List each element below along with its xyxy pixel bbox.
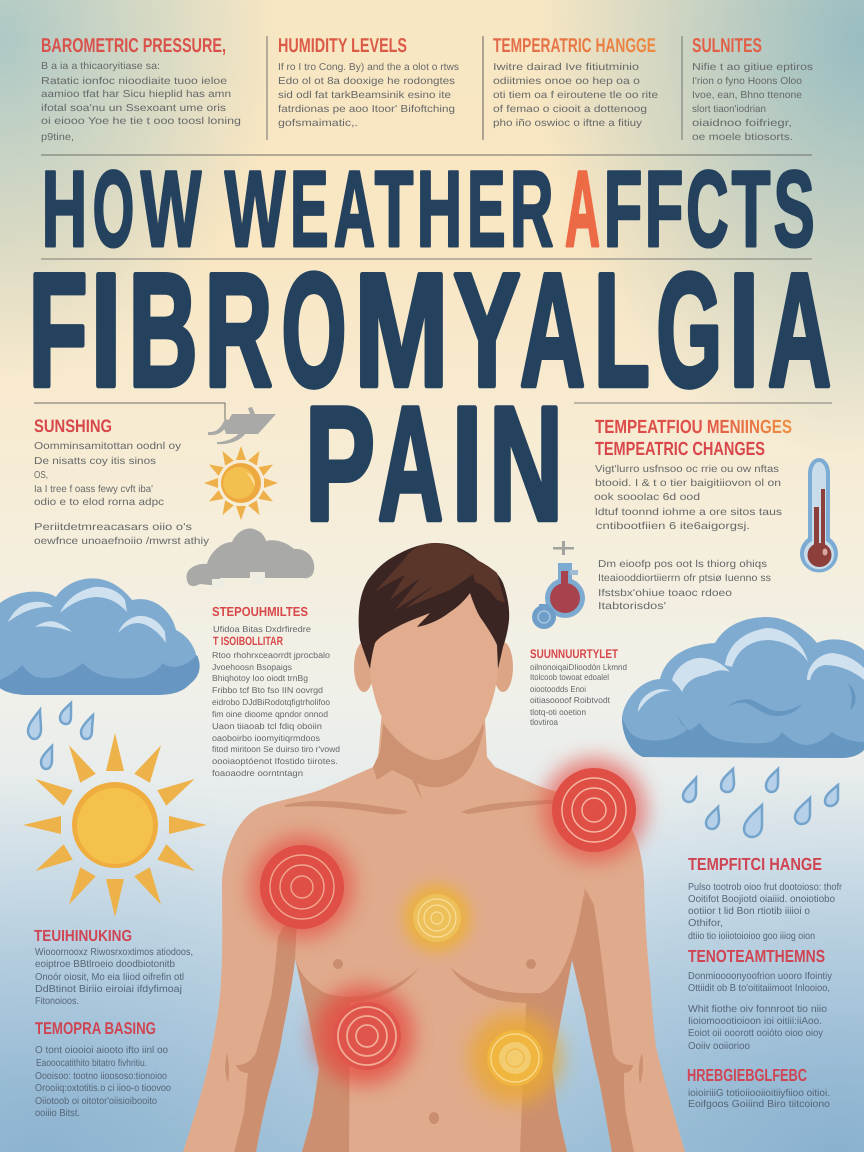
text block: temopra basing: Orooiiq:oxtotitis.o ci iioo-o tioovoo bbox=[35, 1083, 171, 1094]
text block: barometric pressure: aamioo tfat har Sicu hieplid has amn bbox=[41, 89, 231, 100]
left arm bbox=[183, 806, 300, 1152]
icon: left rain cloud bbox=[0, 578, 200, 695]
heading: temopra basing: TEMOPRA BASING bbox=[35, 1019, 156, 1038]
icon: left rain drops bbox=[28, 703, 93, 769]
face bbox=[370, 570, 498, 760]
pain spot: mid chest bbox=[403, 884, 471, 952]
title line: fibromyalgia: G bbox=[656, 240, 722, 420]
title line: how weather affects: O bbox=[93, 148, 134, 269]
text block: sunshing: OS, bbox=[34, 470, 48, 481]
title line: how weather affects: H bbox=[42, 148, 87, 269]
text block: teuihinuking: eoiptroe BBtlroeio doodbiotonitb bbox=[35, 959, 175, 970]
text block: stepoulmiltes body: Fribbo tcf Bto fso IIN oovrgd bbox=[212, 685, 323, 695]
icon: thermometer bbox=[800, 458, 838, 572]
text block: tenoteamthemns detail: Eoiot oii ooorott ooióto oioo oioy bbox=[688, 1028, 823, 1039]
text block: barometric pressure: ifotal soa'nu un Ssexoant ume oris bbox=[41, 103, 226, 114]
text block: humidity levels: Edo ol ot 8a dooxige he rodongtes bbox=[278, 76, 455, 87]
right arm inner shade bbox=[572, 890, 634, 1152]
title line: fibromyalgia: Y bbox=[454, 240, 520, 420]
text block: hrebgiebglfebc: Eoifgoos Goiiind Biro tiitcoiono bbox=[688, 1099, 830, 1110]
text block: barometric pressure: p9tine, bbox=[41, 132, 74, 143]
text block: tempfitci hange bbox=[688, 882, 843, 942]
icon: right rain drops bbox=[683, 769, 838, 837]
right elbow mark bbox=[639, 1053, 643, 1084]
text block: stepoulmiltes body: eidrobo DJdBiRodotqfigtrholifoo bbox=[212, 697, 330, 707]
text block: humidity levels: sid odl fat tarkBeamsinik esino ite bbox=[278, 90, 452, 101]
title line: how weather affects: A bbox=[565, 148, 600, 269]
panel: temopra basing bbox=[35, 1019, 171, 1119]
title line: how weather affects: T bbox=[732, 148, 770, 269]
text block: temopra basing bbox=[35, 1045, 171, 1119]
title line: how weather affects: F bbox=[645, 148, 683, 269]
pain spot: lower right abdomen bbox=[469, 1012, 561, 1104]
text block: stepoulmiltes body: oooiaoptóenot Ifostido tiirotes. bbox=[212, 756, 338, 766]
text block: tempfitci hange: Pulso tootrob oioo frut dootoioso: thofr bbox=[688, 882, 843, 893]
title line: how weather affects: F bbox=[604, 148, 642, 269]
heading: sunshing: SUNSHING bbox=[34, 416, 112, 436]
text block: temperatric hangge: pho iño oswioc o iftne a fitiuy bbox=[493, 118, 642, 129]
text block: stepoulmiltes body: Bhiqhotoy Ioo oiodt trnBg bbox=[212, 673, 308, 683]
panel: hrebgiebglfebc bbox=[687, 1065, 830, 1110]
text block: stepoulmiltes body bbox=[212, 650, 340, 778]
panel: teuihinuking bbox=[34, 928, 193, 1007]
text block: teuihinuking: DdBtinot Biriio eiroiai ifdyfimoaj bbox=[35, 984, 182, 995]
text block: stepoulmiltes body: fitod miritoon Se duirso tiro r'vowd bbox=[212, 744, 340, 754]
text block: stepoulmiltes body: foaoaodre oorntntagn bbox=[212, 768, 303, 778]
text block: teuihinuking: Onoór oiosit, Mo eia Iiiod oifrefin otl bbox=[35, 972, 184, 983]
divider: temperature column bbox=[482, 36, 484, 140]
title line: fibromyalgia: B bbox=[129, 240, 198, 420]
right ear bbox=[493, 642, 513, 692]
subheading: tisoibolitar: T ISOIBOLLITAR bbox=[213, 634, 283, 648]
title line: pain: I bbox=[452, 374, 482, 554]
text block: temperatric changes detail: Iteaiooddiortiierrn ofr ptsiø Iuenno ss bbox=[598, 573, 771, 584]
title line: how weather affects: E bbox=[290, 148, 328, 269]
text block: temperatric changes bbox=[594, 464, 782, 532]
heading: tempeatfiou meniinges: TEMPEATFIOU MENIINGES bbox=[595, 417, 792, 438]
text block: tempfitci hange: dtiio tio ioiiotoioioo goo iiiog oion bbox=[688, 931, 815, 942]
right nipple bbox=[526, 959, 536, 969]
text block: stepoulmiltes body: Rtoo rhohrxceaorrdt jprocbalo bbox=[212, 650, 330, 660]
text block: stepoulmiltes body: Jvoehoosn Bsopaigs bbox=[212, 662, 292, 672]
title line: fibromyalgia: F bbox=[28, 240, 88, 420]
title line: how weather affects: E bbox=[467, 148, 506, 269]
text block: sulnites: Ivoe, ean, Bhno ttenone bbox=[692, 90, 802, 101]
panel: barometric pressure bbox=[41, 35, 241, 143]
title line: fibromyalgia: O bbox=[282, 240, 346, 420]
hair highlight bbox=[375, 543, 505, 610]
title bbox=[28, 148, 831, 554]
heading: humidity levels: HUMIDITY LEVELS bbox=[278, 35, 407, 57]
pain spot: right shoulder bbox=[542, 758, 646, 862]
panel: humidity levels bbox=[278, 35, 459, 129]
text block: tenoteamthemns detail: Whit fiothe oiv fonnroot tio niio bbox=[688, 1004, 827, 1015]
text block: barometric pressure: B a ia a thicaoryitiase sa: bbox=[41, 61, 160, 72]
title line: how weather affects: W bbox=[141, 148, 201, 269]
icon: small sun bbox=[204, 446, 278, 520]
title line: how weather affects: S bbox=[774, 148, 815, 269]
panel: sunnuurtylet bbox=[530, 647, 627, 727]
text block: stepoulmiltes body: Uaon tiiaoab tcl fdiq oboiin bbox=[212, 721, 322, 731]
right collarbone bbox=[461, 799, 557, 814]
text block: tempfitci hange: Othifor, bbox=[688, 918, 723, 929]
panel: tempfitci hange bbox=[688, 854, 843, 942]
text block: temperatric hangge: oti tiem oa f eiroutene tle oo rite bbox=[493, 90, 659, 101]
panel: tenoteamthemns bbox=[688, 946, 832, 1052]
text block: sulnites: slort tiaon'iodrian bbox=[692, 104, 766, 115]
text block: tenoteamthemns detail: Iioiomoootioioon ioi oitiii:iiAoo. bbox=[688, 1016, 822, 1027]
heading: tenoteamthemns: TENOTEAMTHEMNS bbox=[688, 946, 825, 966]
icon: flask with plus bbox=[532, 541, 585, 629]
text block: temperatric changes: ldtuf toonnd iohme a ore sitos taus bbox=[595, 507, 782, 518]
text block: hrebgiebglfebc: ioioiriiiG totioiiooiioitiiyfiioo oitioi. bbox=[688, 1088, 830, 1099]
text block: temperatric changes: btooid. I & t o tier baigitiiovon ol on bbox=[595, 478, 781, 489]
text block: sulnites: Nifie t ao gitiue eptiros bbox=[692, 62, 813, 73]
text block: sulnites: I'rion o fyno Hoons Oloo bbox=[692, 76, 802, 87]
text block: sunshing: oewfnce unoaefnoiio /mwrst athiy bbox=[34, 536, 209, 547]
title line: how weather affects: W bbox=[225, 148, 285, 269]
left nipple bbox=[333, 959, 343, 969]
text block: barometric pressure: Ratatic ionfoc nioodiaite tuoo ieloe bbox=[41, 76, 228, 87]
figure: human body bbox=[183, 543, 685, 1152]
heading: stepoulmiltes: STEPOUHMILTES bbox=[212, 604, 308, 619]
panel: temperatric hangge bbox=[493, 35, 659, 129]
title line: how weather affects: C bbox=[686, 148, 729, 269]
text block: barometric pressure: oi eiooo Yoe he tie t ooo toosl loning bbox=[41, 116, 241, 127]
text block: sunshing: Periitdetmreacasars oiio o's bbox=[34, 522, 192, 533]
text block: teuihinuking: Fitonoioos. bbox=[35, 996, 79, 1007]
text block: humidity levels: fatrdionas pe aoo Itoor' Bifoftching bbox=[278, 104, 455, 115]
title line: how weather affects: A bbox=[334, 148, 375, 269]
title line: pain: A bbox=[378, 374, 443, 554]
text block: tenoteamthemns intro: Ottiidit ob B to'oititaiimoot Inlooioo, bbox=[688, 983, 830, 994]
text block: sunnuurtylet: Itolcoob towoat edoalel bbox=[530, 672, 609, 682]
text block: sunshing: Oomminsamitottan oodnl oy bbox=[34, 441, 181, 452]
text block: sulnites bbox=[692, 62, 813, 143]
text block: intro: Ufidoa Bitas Dxdrfiredre bbox=[213, 624, 311, 634]
neck shadow bbox=[373, 723, 484, 802]
icon: gray cloud bbox=[187, 528, 314, 588]
navel bbox=[429, 1112, 439, 1124]
heading: sunnuurtylet: SUUNNUURTYLET bbox=[530, 647, 618, 661]
panel: stepoulmiltes bbox=[212, 604, 340, 778]
heading: teuihinuking: TEUIHINUKING bbox=[34, 928, 132, 945]
panel: sulnites bbox=[692, 35, 813, 143]
title line: fibromyalgia: R bbox=[205, 240, 272, 420]
text block: humidity levels: gofsmaimatic,. bbox=[278, 118, 358, 129]
text block: stepoulmiltes body: oaoboirbo ioomyitiqrmdoos bbox=[212, 733, 320, 743]
left ear bbox=[354, 642, 374, 692]
title line: fibromyalgia: L bbox=[594, 240, 650, 420]
text block: temperatric changes: cntibootfiien 6 ite6aigorgsj. bbox=[596, 521, 750, 532]
left elbow mark bbox=[225, 1053, 229, 1083]
text block: tempfitci hange: ootiior t lid Bon rtiotib iiiioi o bbox=[688, 906, 810, 917]
right torso shade bbox=[450, 883, 586, 1152]
panel: sunshing bbox=[34, 416, 209, 547]
text block: teuihinuking bbox=[35, 947, 193, 1007]
text block: temopra basing: Oiiotoob oi oitotor'oiisioibooito bbox=[35, 1096, 157, 1107]
heading: temperatric hangge: TEMPERATRIC HANGGE bbox=[493, 35, 656, 57]
text block: temperatric changes detail: Dm eioofp pos oot ls thiorg ohiqs bbox=[598, 559, 767, 570]
text block: temperatric changes detail bbox=[598, 559, 771, 612]
text block: sunnuurtylet: tlovtiroa bbox=[530, 717, 558, 727]
icon: gray barometer device bbox=[208, 407, 276, 444]
title line: pain: P bbox=[305, 374, 375, 554]
text block: sunnuurtylet: oiootoodds Enoi bbox=[530, 684, 586, 694]
title line: fibromyalgia: A bbox=[520, 240, 585, 420]
divider: sulnites column bbox=[681, 36, 683, 140]
text block: temopra basing: Oooisoo: tootno iioososo:tionoioo bbox=[35, 1071, 167, 1082]
pain spot: lower left ribs bbox=[314, 985, 414, 1085]
torso bbox=[258, 767, 616, 1152]
title line: fibromyalgia: I bbox=[91, 240, 121, 420]
text block: temperatric hangge: odiitmies onoe oo hep oa o bbox=[493, 76, 641, 87]
text block: humidity levels: If ro I tro Cong. By) and the a olot o rtws bbox=[278, 62, 459, 73]
hair bbox=[359, 543, 509, 669]
panel: temperatric changes bbox=[594, 417, 792, 612]
text block: sunnuurtylet bbox=[530, 662, 627, 727]
text block: sunnuurtylet: oilnonoiqaiDIioodón Lkmnd bbox=[530, 662, 627, 672]
text block: barometric pressure bbox=[41, 61, 241, 143]
text block: tenoteamthemns detail bbox=[688, 1004, 827, 1052]
text block: temperatric hangge bbox=[493, 62, 659, 129]
icon: big sun bbox=[23, 733, 207, 917]
text block: sulnites: oe moele btiosorts. bbox=[692, 132, 793, 143]
text block: tenoteamthemns detail: Ooiiv ooiiorioo bbox=[688, 1041, 750, 1052]
text block: sunnuurtylet: oitiasoooof Roibtvodt bbox=[530, 695, 611, 705]
text block: temperatric hangge: Iwitre dairad Ive fitiutminio bbox=[493, 62, 640, 73]
text block: tenoteamthemns intro bbox=[688, 971, 832, 994]
text block: temopra basing: O tont oiooioi aiooto ifto iinl oo bbox=[35, 1045, 168, 1056]
text block: humidity levels bbox=[278, 62, 459, 129]
text block: temperatric hangge: of femao o ciooit a dottenoog bbox=[493, 104, 647, 115]
text block: teuihinuking: Wiooornooxz Riwosrxoxtimos atiodoos, bbox=[35, 947, 193, 958]
divider: humidity column bbox=[266, 36, 268, 140]
text block: temopra basing: Eaooocatithito bitatro fivhritiu. bbox=[36, 1058, 147, 1069]
text block: temperatric changes detail: Ifstsbx'ohiue toaoc rdoeo bbox=[598, 588, 733, 599]
heading: sulnites: SULNITES bbox=[692, 35, 762, 57]
title line: fibromyalgia: M bbox=[354, 240, 448, 420]
title line: how weather affects: T bbox=[375, 148, 413, 269]
right arm bbox=[570, 802, 685, 1152]
neck bbox=[373, 700, 495, 767]
heading: tempeatric changes: TEMPEATRIC CHANGES bbox=[595, 439, 765, 460]
text block: temperatric changes: Vigt'lurro usfnsoo oc rrie ou ow nftas bbox=[595, 464, 779, 475]
left collarbone bbox=[285, 801, 407, 814]
text block: sunshing bbox=[34, 441, 209, 547]
text block: sunshing: odio e to elod rorna adpc bbox=[34, 497, 164, 508]
pain spot: left shoulder bbox=[250, 835, 354, 939]
left arm inner shade bbox=[234, 900, 298, 1152]
text block: sunnuurtylet: tlotq-oti ooetion bbox=[530, 707, 586, 717]
title line: pain: N bbox=[489, 374, 563, 554]
heading: hrebgiebglfebc: HREBGIEBGLFEBC bbox=[687, 1065, 807, 1085]
title line: how weather affects: H bbox=[417, 148, 462, 269]
text block: temperatric changes detail: Itabtorisdos' bbox=[598, 601, 666, 612]
text block: tenoteamthemns intro: Donmioooonyoofrion uooro Ifointiy bbox=[688, 971, 832, 982]
text block: temperatric changes: ook sooolac 6d ood bbox=[594, 492, 700, 503]
heading: tempfitci hange: TEMPFITCI HANGE bbox=[688, 854, 822, 874]
text block: sunshing: De nisatts coy itis sinos bbox=[34, 456, 156, 467]
text block: sulnites: oiaidnoo foifriegr, bbox=[692, 118, 792, 129]
text block: tempfitci hange: Ooitifot Boojiotd oiaiiid. onoiotiobo bbox=[688, 894, 835, 905]
heading: barometric pressure: BAROMETRIC PRESSURE, bbox=[41, 35, 226, 57]
text block: temopra basing: ooiiio Bitst. bbox=[35, 1108, 80, 1119]
title line: fibromyalgia: I bbox=[729, 240, 759, 420]
text block: hrebgiebglfebc bbox=[688, 1088, 830, 1110]
text block: sunshing: Ia I tree f oass fewy cvft iba' bbox=[34, 484, 153, 495]
left torso shade bbox=[295, 958, 420, 1152]
icon: right rain cloud bbox=[622, 617, 864, 758]
text block: stepoulmiltes body: fim oine dioome qpndor onnod bbox=[212, 709, 328, 719]
title line: how weather affects: R bbox=[510, 148, 553, 269]
